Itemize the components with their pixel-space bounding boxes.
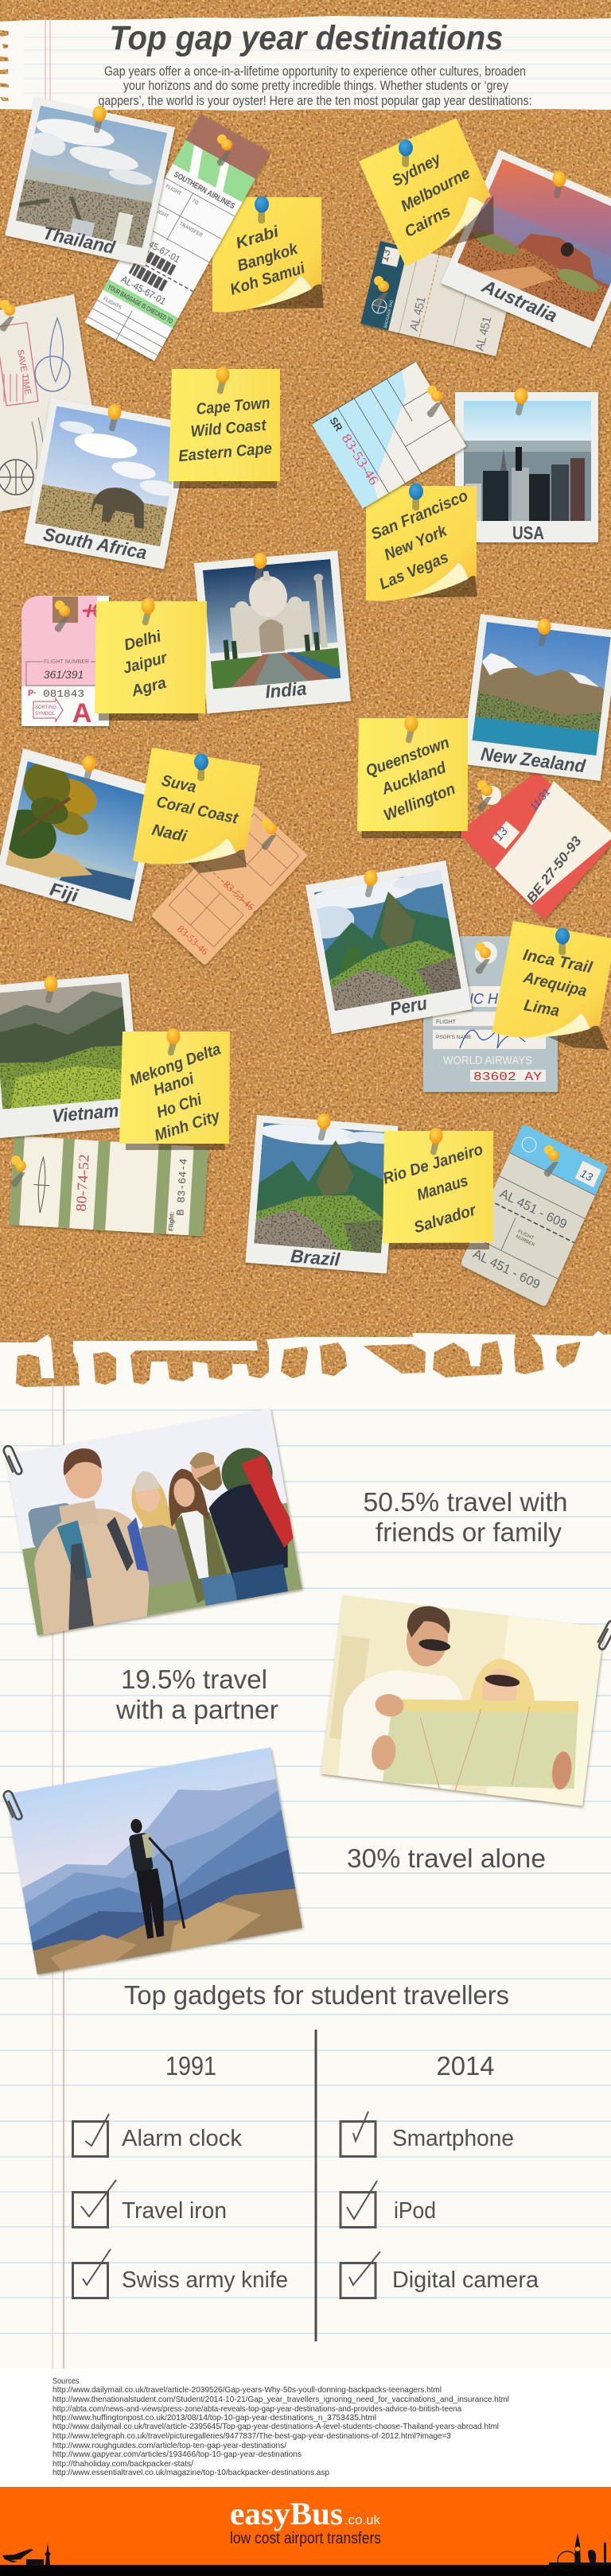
ticket: World Airways: WORLD AIRWAYS (443, 1054, 532, 1067)
pin (555, 927, 570, 955)
baggage tag: Australia (360, 241, 516, 356)
intro text: gappers’, the world is your oyster! Here are the ten most popular gap year destinations: (99, 94, 531, 108)
polaroid: New Zealand (462, 614, 611, 781)
boarding pass: beige with blue top: FLIGHT (517, 1230, 535, 1241)
pin (317, 1113, 331, 1140)
checklist item: iPod: iPod (394, 2198, 436, 2224)
boarding pass: green stripes: 80-74-52 (73, 1154, 92, 1212)
checklist item: Smartphone: Smartphone (392, 2126, 514, 2151)
label: South Africa (41, 523, 149, 563)
sticky note: Thailand cities: Bangkok (235, 240, 301, 275)
pin on baggage tag (374, 276, 389, 308)
boarding pass: light blue SR: 83-53-46 (339, 431, 382, 488)
luggage tag: pink: A (72, 698, 91, 729)
polaroid: Peru (297, 859, 480, 1035)
pin on World Airways ticket (476, 942, 491, 974)
sticky note: Brazil cities: Salvador (412, 1201, 479, 1237)
sticky note: Thailand cities: Koh Samui (228, 259, 307, 299)
sources panel: http://thaholiday.com/backpacker-stats/ (53, 2459, 193, 2469)
sticky note: Peru cities: Arequipa (521, 969, 589, 1000)
luggage tag: red (458, 771, 611, 920)
sticky note: Australia cities: Cairns (402, 203, 453, 241)
paper clip (2, 1444, 23, 1476)
sources panel: Sources (53, 2376, 80, 2386)
checklist item: Swiss army knife (73, 2249, 288, 2298)
pin (253, 553, 267, 580)
luggage tag: pink (21, 596, 109, 729)
checklist item: Travel iron: Travel iron (122, 2198, 227, 2224)
sticky note: Thailand cities: Krabi (234, 223, 281, 253)
postcard left (0, 294, 103, 511)
label: Thailand (41, 222, 118, 258)
sticky note: New Zealand cities (357, 716, 468, 838)
sticky note: South Africa cities: Wild Coast (190, 417, 268, 441)
label: Fiji (48, 878, 80, 907)
baggage tag: Australia: 13 (377, 247, 393, 263)
checklist item: Alarm clock (73, 2114, 243, 2157)
sticky note: Thailand cities (212, 197, 324, 312)
polaroid: Vietnam (0, 973, 142, 1138)
postcard left: SAVE TIME (15, 348, 33, 395)
pin (364, 870, 377, 897)
boarding pass: green stripes (9, 1136, 208, 1236)
stat: partner (115, 1665, 278, 1724)
luggage tag: pink: SORTING (35, 705, 57, 710)
boarding pass: light blue SR: SR (327, 415, 345, 433)
boarding pass: beige with blue top (460, 1124, 608, 1307)
sticky note: India cities: Jaipur (121, 649, 169, 678)
pin (430, 1128, 442, 1155)
pin (167, 1028, 180, 1055)
notebook paper lower section (0, 1331, 611, 2368)
boarding pass: Southern Airlines: FLIGHT (165, 185, 182, 196)
label: India (264, 678, 308, 702)
checklist item: Travel iron (73, 2180, 227, 2227)
boarding pass: Southern Airlines: FLIGHTS (102, 297, 122, 311)
sticky note: South Africa cities (169, 367, 280, 488)
checklist item: Swiss army knife: Swiss army knife (122, 2267, 288, 2293)
pin on San Francisco sticky (409, 484, 423, 511)
pin (92, 106, 107, 133)
boarding pass: beige with blue top: AL 451 - 609 (471, 1247, 542, 1292)
pin on sticky (255, 196, 269, 223)
sticky note: Vietnam cities: Hanoi (151, 1070, 197, 1099)
checklist item: Smartphone (341, 2112, 514, 2157)
pin (142, 598, 154, 625)
sticky note: Fiji cities (133, 748, 260, 879)
sticky note: Vietnam cities: Ho Chi (154, 1090, 204, 1121)
ticket: World Airways: 83602 AY (473, 1070, 542, 1084)
sticky note: Vietnam cities: Minh City (152, 1107, 223, 1145)
label: Peru (388, 993, 429, 1020)
label: Vietnam (51, 1100, 119, 1126)
header paper (0, 16, 611, 111)
stat: partner: with a partner (115, 1695, 278, 1724)
label: Australia (478, 275, 561, 326)
pin (399, 140, 413, 167)
boarding pass: Southern Airlines: TRANSFER (178, 222, 204, 239)
checklist item: Digital camera (341, 2252, 539, 2298)
baggage tag: Australia: AL 451 (473, 315, 494, 352)
pin (83, 756, 95, 783)
stat: alone: 30% travel alone (347, 1844, 546, 1873)
pin (262, 818, 277, 850)
stat: friends or family (363, 1487, 568, 1547)
sticky note: India cities (95, 598, 207, 721)
boarding pass: beige with blue top: AL 451 - 609 (498, 1187, 569, 1232)
pin (544, 1145, 559, 1177)
sticky note: Brazil cities: Manaus (415, 1172, 470, 1204)
sticky note: Brazil cities (381, 1128, 493, 1249)
sticky note: New Zealand cities: Wellington (381, 780, 458, 825)
sticky note: South Africa cities: Cape Town (196, 394, 270, 418)
polaroid: Thailand (5, 97, 175, 266)
cork board background (0, 0, 611, 1400)
boarding pass: Southern Airlines (85, 114, 270, 361)
sticky note: Peru cities: Inca Trail (522, 946, 594, 977)
boarding pass: orange: 83-53-46 (175, 923, 211, 958)
sources panel: http://abta.com/news-and-views/press-zone/abta-reveals-top-gap-year-destinations-and-provides-advice-to-british-teena (53, 2404, 461, 2414)
column divider (315, 2030, 317, 2341)
pin on pink tag (55, 600, 70, 632)
pin (194, 754, 208, 781)
polaroid: South Africa (24, 398, 191, 569)
boarding pass: orange: 83-53-46 (221, 878, 257, 913)
polaroid: Australia (441, 150, 611, 348)
boarding pass: Southern Airlines: YOUR BAGGAGE IS CHECKED TO (107, 284, 174, 325)
boarding pass: orange (150, 805, 308, 966)
sources panel: http://www.roughguides.com/article/top-ten-gap-year-destinations/ (53, 2441, 286, 2450)
sticky note: Vietnam cities: Mekong Delta (127, 1040, 223, 1090)
label: Brazil (290, 1245, 341, 1270)
luggage tag: pink: 081843 (43, 688, 84, 700)
sticky note: USA cities (366, 486, 477, 601)
polaroid: India (194, 550, 351, 713)
sticky note: Fiji cities: Coral Coast (155, 793, 240, 828)
sticky note: Vietnam cities (119, 1028, 230, 1150)
sticky note: New Zealand cities: Queenstown (364, 734, 452, 780)
title: Top gap year destinations (110, 19, 503, 57)
boarding pass: light blue SR (312, 362, 466, 508)
footer: easyBus: .co.uk (344, 2512, 380, 2527)
sources panel: http://www.thenationalstudent.com/Student/2014-10-21/Gap_year_travellers_ignoring_need_for_vaccinations_and_insurance.html (53, 2395, 509, 2404)
ticket: World Airways: IC H93 (469, 991, 514, 1007)
sticky note: New Zealand cities: Auckland (379, 759, 449, 798)
boarding pass: beige with blue top: NUMBER (515, 1234, 535, 1249)
ticket: World Airways: PSGR'S NAME (436, 1035, 472, 1040)
paper clip (2, 1789, 23, 1821)
photo: couple with map (321, 1595, 605, 1806)
luggage tag: red: 13 (492, 824, 511, 844)
sticky note: USA cities: New York (382, 522, 450, 564)
sticky note: Fiji cities: Nadi (150, 822, 189, 845)
sticky note: Brazil cities: Rio De Janeiro (381, 1140, 485, 1187)
pin (404, 716, 418, 743)
column heading: 2014: 2014 (436, 2051, 495, 2081)
sources panel: http://www.huffingtonpost.co.uk/2013/08/14/top-10-gap-year-destinations_n_3753435.html (53, 2413, 376, 2423)
baggage tag: Australia: BAGGAGE TAG (383, 300, 395, 328)
boarding pass: Southern Airlines: AL-45-67-01 (119, 274, 168, 307)
sticky note: Australia cities (359, 117, 508, 272)
boarding pass: green stripes: Flight: (167, 1211, 176, 1231)
photo: friends with backpacks (6, 1408, 308, 1636)
polaroid: Brazil (245, 1113, 403, 1274)
luggage tag: pink: P· (28, 689, 37, 698)
luggage tag: pink: SYMBOL (35, 712, 56, 717)
luggage tag: red: BE 27-50-93 (523, 833, 585, 906)
checklist item: iPod (341, 2181, 436, 2227)
column heading: 1991: 1991 (165, 2051, 216, 2081)
boarding pass: beige with blue top: 13 (578, 1167, 595, 1183)
sticky note: India cities: Agra (129, 674, 168, 701)
luggage tag: pink: FLIGHT NUMBER (44, 659, 89, 665)
polaroid: USA (455, 388, 598, 543)
footer: easyBus (0, 2487, 611, 2576)
intro text: Gap years offer a once-in-a-lifetime opportunity to experience other cultures, broaden (104, 64, 526, 79)
sources panel: http://www.essentialtravel.co.uk/magazine/top-10/backpacker-destinations.asp (53, 2468, 329, 2477)
tagline: low cost airport transfers (230, 2530, 381, 2547)
label: New Zealand (480, 743, 587, 776)
sources panel: http://www.dailymail.co.uk/travel/article-2395645/Top-gap-year-destinations-A-level-students-choose-Thailand-years-abroad.html (53, 2422, 499, 2431)
sticky note: South Africa cities: Eastern Cape (177, 440, 273, 465)
heading: top gadgets: Top gadgets for student travellers (124, 1980, 509, 2010)
sticky note: India cities: Delhi (123, 627, 163, 655)
pin (45, 976, 57, 1003)
photo: solo hiker (6, 1747, 302, 1975)
sources panel: http://www.telegraph.co.uk/travel/picturegalleries/9477837/The-best-gap-year-destinations-of-2012.html?image=3 (53, 2431, 451, 2441)
pin (427, 386, 442, 418)
sticky note: USA cities: Las Vegas (377, 549, 451, 593)
pin on red tag (477, 780, 492, 812)
skyline right (549, 2533, 611, 2570)
luggage tag: red: 11/31 (527, 786, 553, 813)
pin on ticket (217, 134, 232, 166)
pin on green ticket (11, 1156, 26, 1187)
boarding pass: Southern Airlines: TO (191, 199, 199, 206)
ticket: World Airways: FLIGHT (436, 1020, 457, 1025)
boarding pass: green stripes: B 83-64-4 (174, 1158, 190, 1216)
sources panel: http://www.gapyear.com/articles/193466/top-10-gap-year-destinations (53, 2450, 302, 2459)
pin (108, 404, 121, 431)
pin (514, 388, 528, 415)
ticket: World Airways (423, 936, 558, 1092)
pin (0, 300, 15, 332)
stat: partner: 19.5% travel (121, 1665, 267, 1694)
pin (538, 619, 551, 646)
logo: easyBus (230, 2496, 343, 2531)
skyline left (2, 2543, 51, 2566)
boarding pass: Southern Airlines: FLIGHT (152, 207, 169, 220)
boarding pass: Southern Airlines: AL-45-67-01 (134, 232, 182, 265)
intro text: your horizons and do some pretty incredible things. Whether students or ‘grey (123, 79, 509, 93)
luggage tag: pink: 361/391 (44, 668, 84, 681)
label: USA (512, 523, 544, 543)
polaroid: Fiji (0, 747, 161, 923)
sticky note: USA cities: San Francisco (368, 487, 471, 543)
sticky note: Peru cities (492, 921, 611, 1051)
sticky note: Peru cities: Lima (523, 997, 561, 1020)
sources panel: http://www.dailymail.co.uk/travel/article-2039526/Gap-years-Why-50s-youll-donning-backpacks-teenagers.html (53, 2385, 442, 2395)
stat: friends or family: 50.5% travel with (363, 1487, 568, 1517)
boarding pass: Southern Airlines: SOUTHERN AIRLINES (172, 170, 236, 212)
checklist item: Digital camera: Digital camera (392, 2267, 539, 2293)
sticky note: Fiji cities: Suva (160, 772, 198, 796)
intro text (99, 64, 531, 108)
sticky note: Australia cities: Melbourne (398, 165, 473, 216)
sticky note: Australia cities: Sydney (389, 150, 444, 190)
pin (216, 367, 229, 394)
paper clip (596, 1619, 611, 1650)
pin (552, 171, 566, 198)
checklist item: Alarm clock: Alarm clock (122, 2126, 243, 2151)
stat: friends or family: friends or family (376, 1517, 562, 1547)
sources panel (0, 2368, 611, 2487)
baggage tag: Australia: AL 451 (407, 295, 429, 332)
